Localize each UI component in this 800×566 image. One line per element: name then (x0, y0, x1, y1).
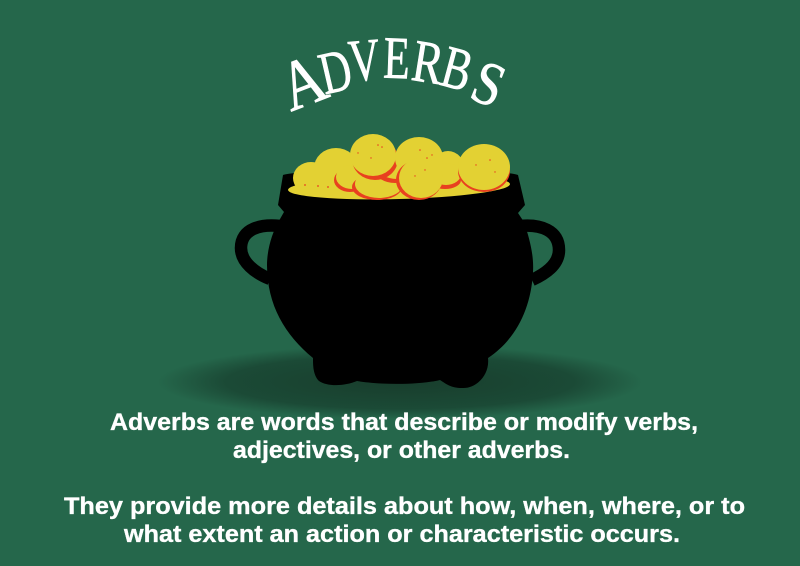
gold surface (288, 172, 510, 202)
paragraph 2 (64, 493, 745, 548)
description text (64, 409, 745, 548)
title: Adverbs: D (313, 36, 358, 108)
front centre coin (396, 158, 443, 200)
coin speckles (304, 144, 496, 188)
title: Adverbs: B (435, 33, 480, 105)
back coins (293, 148, 465, 194)
lower middle coin (352, 170, 403, 200)
paragraph 1: Adverbs are words that describe or modify verbs, (110, 409, 698, 436)
title: Adverbs: E (382, 25, 411, 92)
title: Adverbs: R (408, 27, 449, 98)
title: Adverbs: A (269, 39, 337, 127)
ground shadow (158, 345, 642, 419)
paragraph 2: They provide more details about how, when, where, or to (64, 493, 745, 520)
icon: right handle (520, 226, 559, 280)
title: Adverbs: S (462, 48, 515, 121)
top left coin (350, 134, 398, 180)
right coin (458, 144, 510, 192)
small side coins with red edges (334, 163, 461, 192)
title: Adverbs (269, 25, 515, 127)
icon: left handle (241, 226, 280, 279)
paragraph 1: adjectives, or other adverbs. (233, 437, 570, 464)
paragraph 2: what extent an action or characteristic occurs. (123, 521, 680, 548)
pot of gold (288, 134, 510, 202)
cauldron body (267, 170, 533, 388)
paragraph 1 (110, 409, 698, 464)
cauldron (241, 170, 559, 388)
top right coin (395, 137, 443, 179)
title: Adverbs: V (346, 26, 383, 95)
centre coin behind (375, 153, 417, 183)
